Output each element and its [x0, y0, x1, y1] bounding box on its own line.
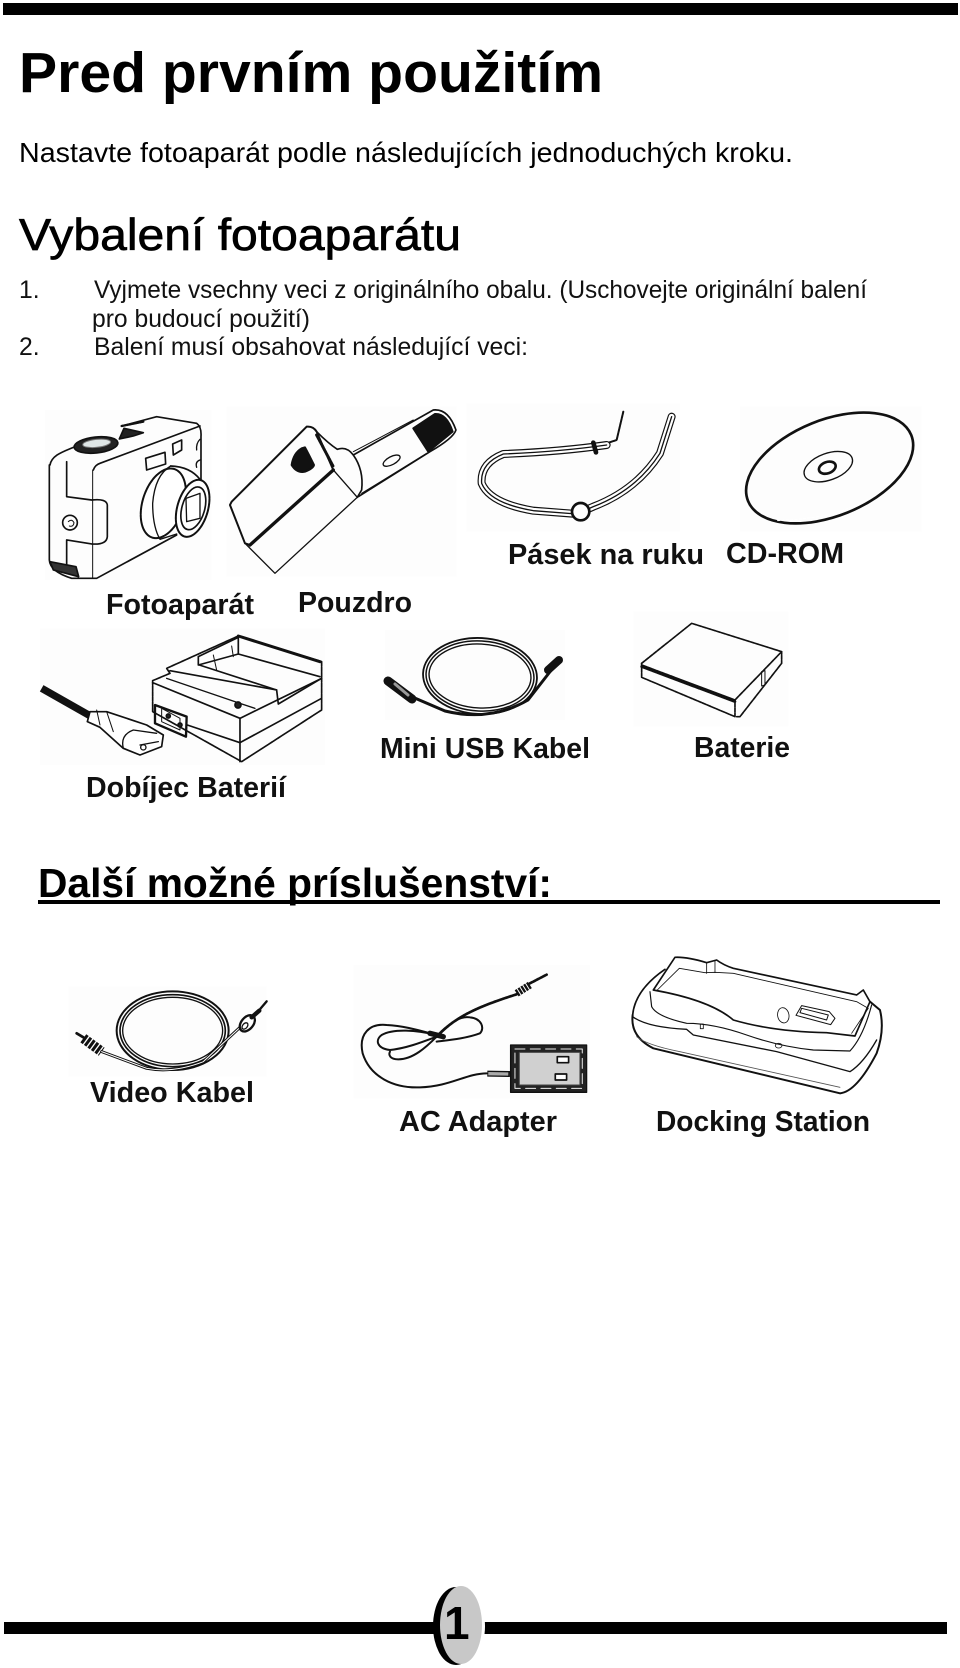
label: ac adapter: AC Adapter [399, 1105, 557, 1137]
label: camera: Fotoaparát [106, 588, 255, 620]
title: Pred prvním použitím [19, 41, 603, 105]
label: case: Pouzdro [298, 586, 412, 618]
icon: battery charger [40, 628, 325, 765]
icon: cd-rom [730, 391, 929, 545]
page number badge [433, 1586, 485, 1666]
label: video cable: Video Kabel [90, 1076, 254, 1108]
top bar [3, 3, 958, 15]
numbered list: 2. [19, 334, 40, 361]
icon: battery [633, 612, 788, 727]
icon: docking station [632, 957, 882, 1093]
label: cd-rom: CD-ROM [726, 537, 844, 569]
icon: video cable [68, 987, 267, 1077]
label: battery charger: Dobíjec Baterií [86, 771, 287, 803]
numbered list [19, 277, 867, 361]
numbered list: 1. [19, 277, 40, 304]
label: battery: Baterie [694, 731, 790, 763]
footer bar [4, 1622, 947, 1634]
heading: unpacking: Vybalení fotoaparátu [19, 211, 461, 260]
numbered list: pro budoucí použití) [92, 306, 310, 333]
icon: wrist strap [467, 403, 680, 532]
heading: optional accessories: Další možné príslušenství: [38, 860, 552, 906]
heading underline [38, 900, 940, 904]
intro text: Nastavte fotoaparát podle následujících jednoduchých kroku. [19, 137, 793, 168]
icon: mini usb cable [385, 630, 565, 720]
icon: ac adapter [353, 965, 590, 1098]
numbered list: Vyjmete vsechny veci z originálního obalu. (Uschovejte originální balení [94, 277, 867, 304]
numbered list: Balení musí obsahovat následující veci: [94, 334, 528, 361]
icon: camera [45, 410, 215, 580]
page number badge: 1 [444, 1597, 470, 1649]
label: mini usb cable: Mini USB Kabel [380, 732, 590, 764]
label: wrist strap: Pásek na ruku [508, 538, 704, 570]
icon: case [227, 407, 457, 577]
label: docking station: Docking Station [656, 1105, 870, 1137]
